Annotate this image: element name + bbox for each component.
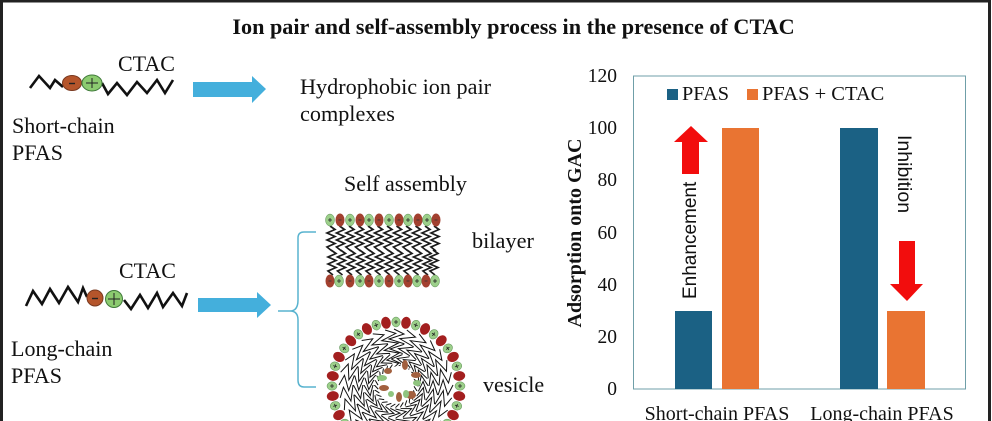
y axis labels: 0 (607, 379, 617, 400)
vesicle diagram (326, 316, 466, 421)
short-chain ion pair molecule (30, 75, 173, 95)
arrow: enhancement up (674, 126, 708, 174)
label: CTAC short: CTAC (118, 51, 175, 76)
heading: self assembly: Self assembly (344, 171, 467, 196)
label: inhibition: Inhibition (893, 135, 915, 213)
bracket (278, 232, 316, 387)
bilayer tails (327, 226, 439, 275)
y axis labels: 20 (598, 327, 617, 348)
label: CTAC long: CTAC (119, 258, 176, 283)
label: bilayer: bilayer (472, 228, 534, 253)
arrow: long-chain to assemblies (198, 292, 271, 318)
text: hydrophobic complexes: complexes (300, 101, 395, 126)
label: long-chain PFAS: PFAS (11, 363, 62, 388)
vesicle outer heads (326, 316, 466, 421)
plot frame (634, 76, 966, 389)
y axis labels: 120 (588, 66, 617, 87)
bilayer bottom heads (326, 274, 440, 288)
arrow: inhibition down (890, 241, 923, 301)
y axis labels: 60 (598, 223, 617, 244)
text: hydrophobic complexes: Hydrophobic ion pair (300, 74, 492, 99)
vesicle tails (338, 328, 454, 421)
y axis labels: 40 (598, 275, 617, 296)
label: short-chain PFAS: PFAS (12, 140, 63, 165)
y axis labels: 80 (598, 170, 617, 191)
y axis labels (588, 66, 617, 400)
label: long-chain PFAS: Long-chain (11, 336, 112, 361)
legend (667, 83, 884, 105)
y axis labels: 100 (588, 118, 617, 139)
label: vesicle: vesicle (483, 372, 544, 397)
bilayer diagram (326, 214, 440, 288)
vesicle inner core (377, 360, 421, 402)
y axis title: Adsorption onto GAC (564, 139, 586, 327)
title: Ion pair and self-assembly process in the presence of CTAC (232, 14, 795, 39)
label: short-chain PFAS: Short-chain (12, 113, 115, 138)
arrow: short-chain to complexes (193, 76, 266, 103)
bars (675, 128, 925, 389)
label: enhancement: Enhancement (680, 181, 701, 299)
x axis labels (645, 403, 954, 421)
legend: PFAS (682, 83, 729, 105)
legend: PFAS + CTAC (762, 83, 884, 105)
bilayer top heads (326, 214, 440, 226)
long-chain ion pair molecule (26, 287, 187, 309)
bar chart (564, 66, 966, 421)
